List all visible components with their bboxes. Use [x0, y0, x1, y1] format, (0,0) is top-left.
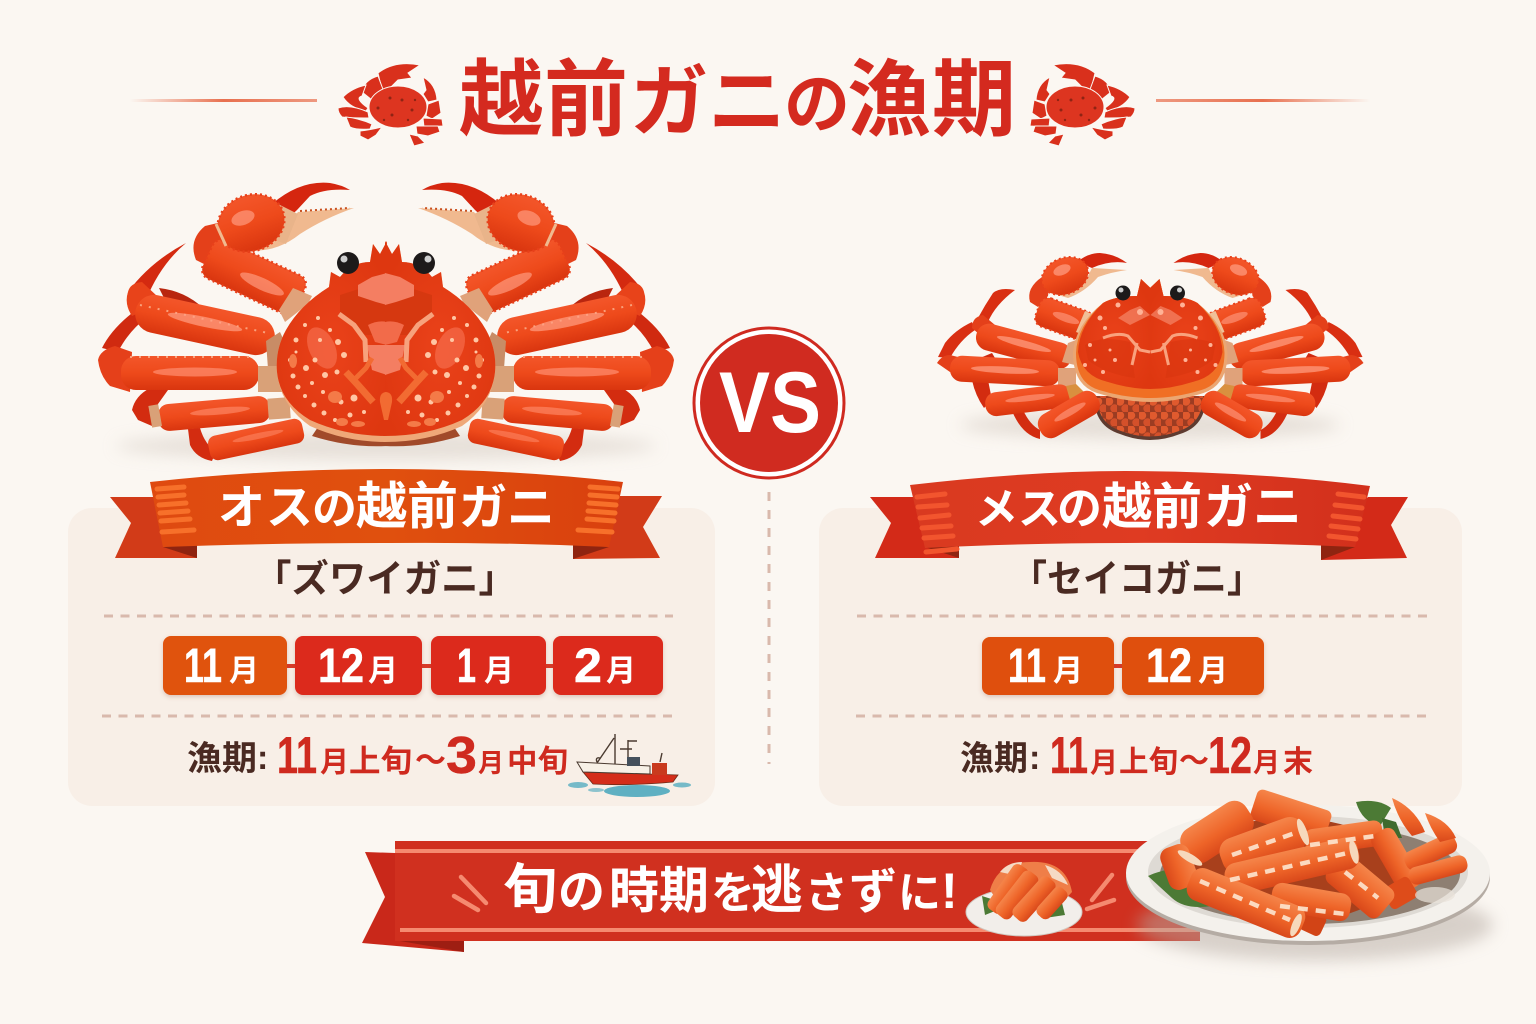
season text	[960, 727, 1313, 785]
ribbon: メスの越前ガニ: メ	[975, 486, 1018, 534]
mound under meat	[1182, 818, 1398, 922]
ribbon: オスの越前ガニ: 前	[407, 478, 458, 535]
panel: female crab	[819, 471, 1462, 806]
season text: :	[257, 739, 268, 777]
banner text: !	[941, 863, 958, 919]
season text: 中旬	[507, 744, 568, 779]
ribbon: オスの越前ガニ: 越	[356, 478, 407, 535]
season text: 12	[1208, 727, 1252, 785]
banner text: ず	[849, 866, 897, 919]
illustration: crab leg platter	[1126, 788, 1493, 961]
ribbon: メスの越前ガニ: ス	[1018, 486, 1061, 534]
ribbon: メスの越前ガニ: ニ	[1253, 481, 1302, 535]
ribbon: メスの越前ガニ: 越	[1102, 479, 1152, 535]
banner text: さ	[805, 870, 848, 918]
pill: 11月: 月	[1053, 655, 1083, 688]
meat highlights	[1200, 833, 1378, 920]
pill: 2月: 2	[574, 640, 602, 693]
title text: ニ	[708, 58, 786, 146]
season text: 月	[1253, 748, 1280, 778]
banner text: 期	[659, 863, 709, 919]
ribbon: オスの越前ガニ: の	[312, 483, 357, 534]
season text: 上旬	[1119, 746, 1178, 779]
pill: 11月: 11	[1008, 640, 1046, 693]
VS badge	[694, 328, 844, 478]
icon: small crab plate	[966, 862, 1082, 936]
banner text: を	[711, 869, 755, 918]
season text: 漁期	[187, 740, 257, 778]
season text: 月	[478, 748, 504, 778]
banner accent lines	[454, 875, 1114, 910]
ribbon: メスの越前ガニ: ガ	[1204, 481, 1253, 535]
pill: 1月	[431, 636, 546, 695]
title text: 期	[932, 53, 1016, 147]
VS badge: VS	[719, 355, 821, 451]
pill: 11月	[163, 636, 287, 695]
pill: 12月: 月	[368, 655, 398, 688]
pill: 1月: 月	[484, 655, 514, 688]
pill: 11月: 月	[229, 655, 259, 688]
season text: 11	[277, 727, 317, 785]
season text	[187, 727, 568, 785]
title text: 漁	[847, 53, 931, 147]
ribbon: オスの越前ガニ: ガ	[459, 482, 507, 535]
banner: 旬の時期を逃さずに!	[362, 841, 1200, 952]
panel: male crab	[68, 469, 715, 806]
title right line	[1156, 99, 1370, 102]
pill: 1月: 1	[457, 640, 476, 693]
ribbon: オスの越前ガニ	[110, 469, 662, 559]
banner text: 逃	[751, 862, 803, 920]
title text: 前	[544, 53, 628, 147]
pill: 11月: 11	[184, 640, 222, 693]
illustration: female crab	[937, 250, 1364, 442]
subtitle: 「ズワイガニ」	[254, 558, 516, 601]
pill: 12月: 月	[1198, 655, 1228, 688]
season text: 月	[1090, 747, 1118, 778]
season text: :	[1029, 739, 1040, 777]
ribbon: オスの越前ガニ: ニ	[507, 482, 555, 535]
ribbon: オスの越前ガニ: オ	[218, 481, 265, 534]
title text: 越	[459, 53, 543, 147]
roe	[1094, 396, 1206, 440]
pill: 12月: 12	[318, 640, 364, 693]
season text: 上旬	[349, 744, 412, 779]
banner text: に	[898, 870, 941, 918]
season text: 〜	[1179, 745, 1209, 778]
pill: 2月	[553, 636, 663, 695]
ribbon: オスの越前ガニ: ス	[266, 481, 313, 534]
title: 越前ガニの漁期	[130, 53, 1370, 147]
title text: の	[784, 67, 850, 141]
month connector	[1110, 664, 1126, 668]
center divider	[768, 492, 770, 764]
season text: 11	[1050, 727, 1088, 785]
meat pieces	[1157, 788, 1469, 942]
illustration: male crab	[98, 183, 674, 462]
season text: 3	[446, 727, 477, 785]
banner text: 旬	[503, 860, 557, 920]
season text: 〜	[415, 743, 446, 778]
month connector	[280, 664, 590, 668]
ribbon: メスの越前ガニ: の	[1057, 483, 1102, 534]
subtitle: 「セイコガニ」	[1011, 559, 1263, 601]
pill: 12月	[295, 636, 422, 695]
pill: 12月	[1122, 637, 1264, 695]
leaves	[1148, 801, 1402, 910]
ribbon: メスの越前ガニ: 前	[1152, 479, 1202, 535]
banner text: の	[558, 865, 605, 918]
pill: 2月: 月	[606, 655, 636, 688]
icon: fishing boat	[568, 734, 691, 797]
banner text: 時	[609, 863, 659, 919]
pill: 11月	[982, 637, 1114, 695]
season text: 漁期	[960, 740, 1028, 778]
icon: small crab right	[1030, 64, 1135, 146]
title text: ガ	[630, 58, 708, 146]
title left line	[130, 99, 317, 102]
ribbon: メスの越前ガニ	[870, 471, 1408, 560]
pill: 12月: 12	[1146, 640, 1192, 693]
season text: 月	[320, 747, 349, 779]
meat end caps	[1176, 817, 1361, 938]
icon: small crab left	[338, 64, 443, 146]
season text: 末	[1283, 746, 1313, 779]
